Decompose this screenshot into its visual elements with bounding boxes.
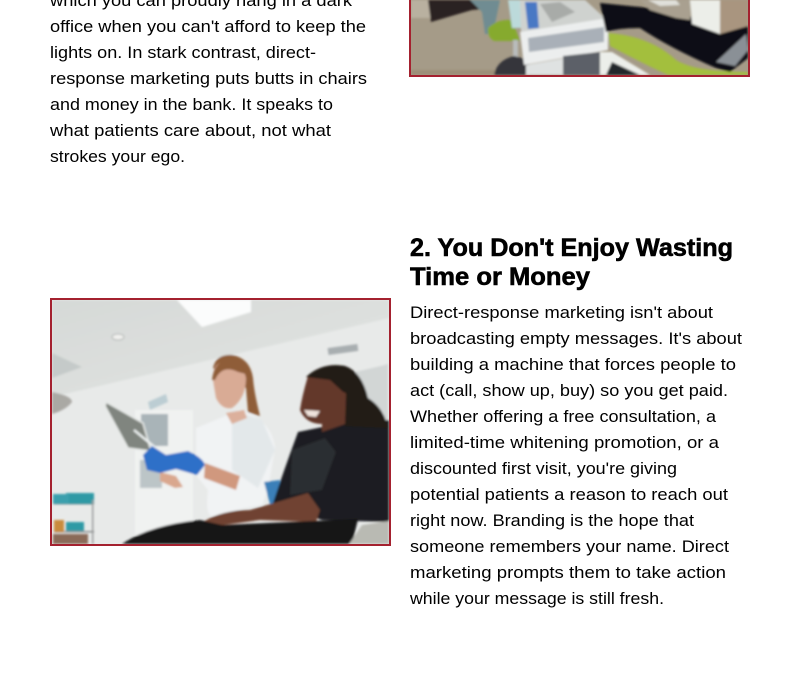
text block: section 2 paragraph: right now. Branding is the hope that (410, 511, 694, 530)
text block: left column paragraph: what patients care about, not what (49, 121, 331, 140)
dentist forearm (204, 463, 240, 490)
text block: section 2 paragraph: broadcasting empty messages. It's about (410, 329, 742, 348)
text block: section 2 paragraph: building a machine that forces people to (410, 355, 736, 374)
heading: section 2 (410, 234, 733, 291)
legs (122, 519, 358, 544)
text block: section 2 paragraph: Direct-response marketing isn't about (410, 303, 713, 322)
text block: section 2 paragraph: marketing prompts them to take action (410, 563, 726, 582)
text block: section 2 paragraph (409, 303, 742, 608)
text block: left column paragraph: and money in the bank. It speaks to (50, 95, 333, 114)
cabinet (135, 410, 193, 535)
text block: section 2 paragraph: Whether offering a free consultation, a (410, 407, 717, 426)
glove (143, 446, 205, 475)
chair arm (349, 521, 389, 544)
dentist body (196, 410, 275, 516)
text block: left column paragraph: strokes your ego. (50, 147, 185, 166)
heading: section 2: 2. You Don't Enjoy Wasting (410, 234, 733, 262)
text block: section 2 paragraph: act (call, show up, buy) so you get paid. (410, 381, 728, 400)
text block: section 2 paragraph: limited-time whitening promotion, or a (410, 433, 720, 452)
patient head (343, 364, 388, 428)
text block: section 2 paragraph: discounted first visit, you're giving (410, 459, 677, 478)
shelf (53, 493, 94, 544)
blue chair (264, 480, 280, 505)
text block: section 2 paragraph: someone remembers your name. Direct (410, 537, 729, 556)
text block: left column paragraph (49, 0, 367, 166)
dentist head (213, 355, 260, 416)
text block: left column paragraph: lights on. In stark contrast, direct- (50, 43, 316, 62)
text block: section 2 paragraph: potential patients a reason to reach out (410, 485, 728, 504)
text block: section 2 paragraph: while your message is still fresh. (409, 589, 664, 608)
photo: dentist showing tablet to patient (51, 299, 390, 545)
patient body (273, 420, 389, 522)
heading: section 2: Time or Money (410, 263, 590, 291)
patient arm (203, 493, 320, 526)
tablet (105, 402, 151, 451)
photo: dental chair with reclining patient (410, 0, 749, 76)
text block: left column paragraph: office when you can't afford to keep the (50, 17, 366, 36)
text block: left column paragraph: response marketing puts butts in chairs (50, 69, 367, 88)
